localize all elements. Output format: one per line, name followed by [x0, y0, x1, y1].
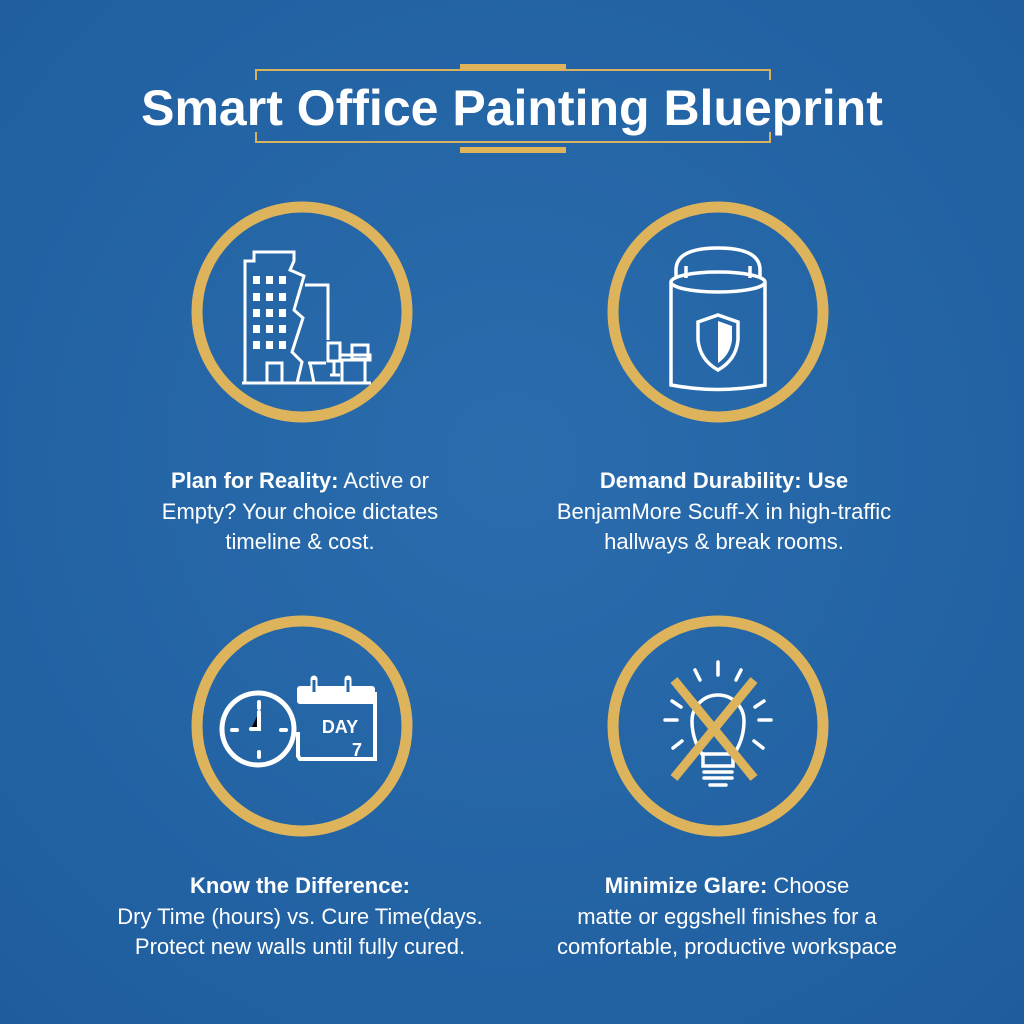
title block: [141, 64, 883, 153]
icon: clock and calendar: DAY: [322, 717, 358, 737]
text: know the difference: Protect new walls until fully cured.: [135, 934, 465, 959]
text: minimize glare: matte or eggshell finishes for a: [577, 904, 877, 928]
title: Smart Office Painting Blueprint: [141, 80, 883, 136]
text: demand durability: BenjamMore Scuff-X in high-traffic: [557, 498, 891, 524]
text: plan for reality: timeline & cost.: [225, 529, 375, 554]
icon: office building: [192, 202, 412, 422]
text: demand durability: hallways & break rooms.: [604, 529, 844, 554]
text: plan for reality: Plan for Reality: Active or: [171, 468, 429, 493]
text: know the difference: Know the Difference:: [190, 873, 410, 898]
text: plan for reality: [162, 468, 438, 554]
text: demand durability: Demand Durability: Use: [600, 468, 848, 493]
text: minimize glare: [557, 873, 897, 959]
text: demand durability: [557, 468, 891, 554]
icon: clock and calendar: [192, 616, 412, 836]
text: know the difference: [117, 873, 483, 959]
text: know the difference: Dry Time (hours) vs. Cure Time(days.: [117, 904, 483, 928]
icon: paint bucket with shield: [608, 202, 828, 422]
text: minimize glare: comfortable, productive workspace: [557, 934, 897, 959]
icon: crossed-out lightbulb: [608, 616, 828, 836]
text: plan for reality: Empty? Your choice dictates: [162, 498, 438, 524]
icon: clock and calendar: 7: [352, 740, 362, 760]
text: minimize glare: Minimize Glare: Choose: [605, 873, 849, 898]
